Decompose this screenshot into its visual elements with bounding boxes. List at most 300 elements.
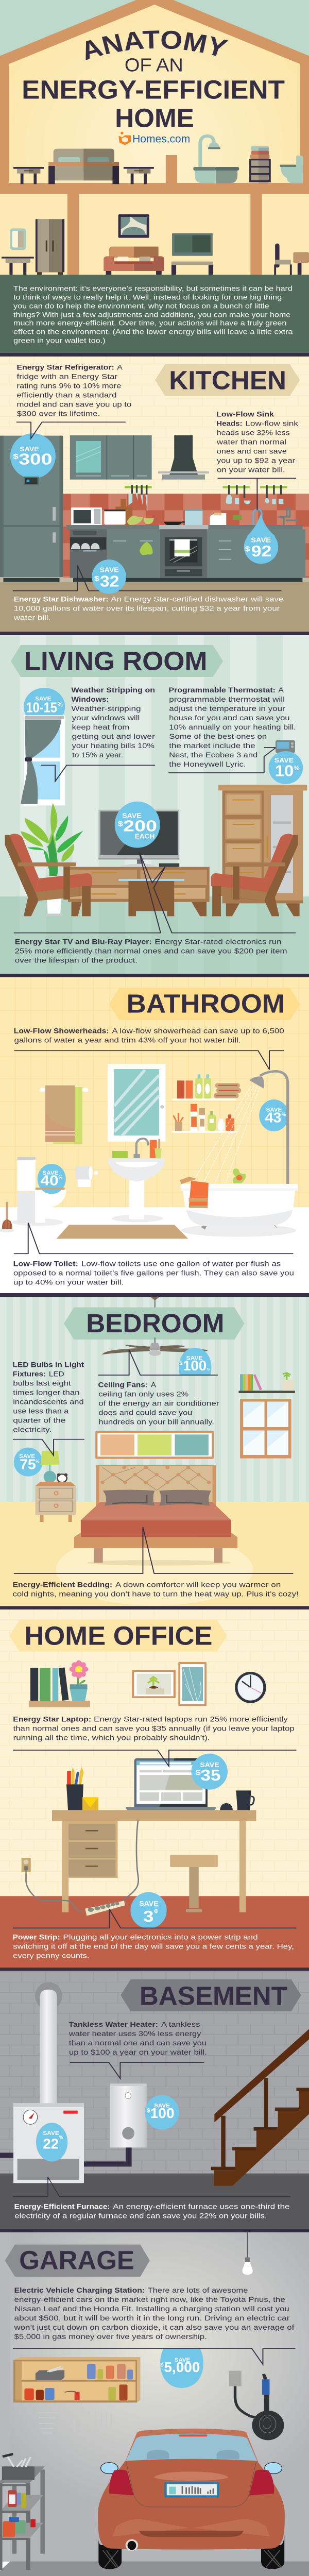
icon: nightstand right (124, 167, 154, 184)
callout: save 300: 300 (19, 450, 52, 468)
text: refrigerator: model and can save you up to (17, 401, 131, 409)
callout line: toilet (14, 1223, 293, 1253)
icon: bookshelf (238, 1372, 295, 1393)
text: charging station: won’t just cut down on carbon dioxide, it can also save you an average of (13, 2324, 295, 2332)
callout: save 92: SAVE (251, 537, 271, 544)
title (22, 30, 285, 133)
icon: fridge display (24, 477, 39, 485)
text: weather stripping (72, 686, 155, 759)
callout: save 32: $ (94, 574, 100, 583)
text: ceiling fans: ceiling fan only uses 2% (98, 1391, 188, 1398)
garage floor (0, 2562, 309, 2576)
callout: save 200 each: SAVE (122, 812, 142, 819)
text: laptop: running all the time, which you probably shouldn’t). (13, 1734, 210, 1742)
callout: save 100: SAVE (154, 2102, 170, 2109)
callout: save 100: 100 (150, 2106, 175, 2121)
callout line: power strip (13, 1909, 297, 1928)
text: tv and blu-ray (15, 938, 287, 964)
icon: stool (170, 1855, 218, 1912)
icon: mirror cabinet (108, 1064, 165, 1142)
callout: save 300: SAVE (20, 446, 39, 453)
text: tankless water heater: A tankless (161, 2021, 200, 2029)
living room floor (0, 896, 309, 974)
callout: save 22 percent (36, 2123, 67, 2162)
text: tv and blu-ray: Energy Star TV and Blu-Ray Player: (15, 938, 152, 946)
text: sink heads: heads use 32% less (217, 429, 289, 437)
callout: save 5000: $ (160, 2362, 164, 2368)
text: charging station: Electric Vehicle Charging Station: (14, 2286, 145, 2295)
callout line: sink (217, 478, 296, 510)
icon: thermostat (276, 740, 295, 753)
icon: bed (74, 1465, 237, 1566)
callout: save 100: $ (147, 2108, 150, 2114)
panel: bedroom (0, 1297, 309, 1609)
icon: refrigerator (0, 436, 63, 578)
callout: save 200 each (115, 802, 160, 848)
text: dishwasher (13, 596, 283, 622)
icon: toilet (12, 1157, 66, 1226)
text: sink heads: ones and can save (217, 448, 287, 455)
sky background (0, 0, 309, 275)
text: power strip (12, 1934, 294, 1960)
callout: save 5000: 5,000 (164, 2360, 200, 2375)
callout: save 32 (92, 560, 126, 594)
text: thermostat: adjust the temperature in your (169, 705, 285, 713)
icon: coffee table (118, 879, 184, 916)
icon: stairs (211, 2029, 309, 2186)
icon: wrenches (38, 2408, 111, 2433)
intro text: things? With just a few adjustments and additions, you can make your home (13, 311, 290, 319)
text: dishwasher: 10,000 gallons of water over its lifespan, cutting $32 a year from your (14, 605, 280, 613)
bedroom floor (0, 1502, 309, 1606)
text: showerheads: Low-Flow Showerheads: (14, 1027, 109, 1035)
callout: save 100 (145, 2095, 179, 2130)
callout: save 10-15 percent: SAVE (35, 695, 52, 702)
text: bedding: A down comforter will keep you warmer on (115, 1581, 281, 1589)
icon: plant (21, 803, 83, 916)
text: tankless water heater: Tankless Water Heater: (69, 2021, 158, 2029)
text: charging station: There are lots of awesome (148, 2286, 248, 2295)
icon: nightstand left (13, 167, 44, 184)
callout: save 10-15 percent (24, 688, 65, 725)
title: OF AN (125, 55, 183, 76)
callout line: led bulbs (13, 1439, 84, 1455)
icon: shower water (194, 1086, 260, 1183)
text: thermostat: house for you and can save you (169, 714, 289, 722)
panel: introduction (0, 275, 309, 357)
icon: toilet paper (76, 1166, 98, 1187)
text: sink heads: on your water bill. (217, 466, 285, 474)
panel: house header (0, 0, 309, 275)
text: weather stripping: Weather-stripping (72, 705, 141, 713)
icon: ceiling fan (101, 1337, 208, 1356)
icon: shelf with books and flower (29, 1660, 90, 1707)
text: bedding (12, 1581, 299, 1598)
intro text: green in your wallet too.) (13, 337, 106, 345)
icon: car (98, 2429, 285, 2569)
icon: towel drawers (249, 146, 271, 183)
icon: tv (98, 810, 179, 867)
text: laptop (13, 1716, 295, 1742)
text: ceiling fans: does and could save you (98, 1409, 192, 1417)
text: furnace: electricity of a regular furnace and can save you 22% on your bills. (14, 2212, 267, 2220)
icon: charging station (229, 2371, 284, 2440)
text: dishwasher: water bill. (13, 614, 50, 622)
text: ceiling fans: of the energy an air conditioner (98, 1400, 219, 1408)
callout: save 92: 92 (251, 542, 271, 560)
callout: save 32: 32 (100, 572, 119, 590)
text: weather stripping: your heating bills 10% (72, 742, 154, 750)
intro text: The environment: it’s everyone’s responsibility, but sometimes it can be hard (13, 285, 293, 293)
callout: save 40 percent: % (59, 1175, 63, 1180)
text: thermostat: A (278, 686, 284, 694)
bathroom floor (0, 1207, 309, 1293)
text: thermostat: 10% annually on your heating bill. (169, 723, 296, 732)
icon: picture (118, 214, 149, 238)
kitchen brick wall (0, 357, 309, 583)
office brick wall (0, 1609, 309, 1896)
text: power strip: every penny counts. (13, 1952, 89, 1960)
callout: save 10 percent: SAVE (274, 757, 294, 764)
icon: tankless water heater (110, 2083, 147, 2147)
bathroom tile wall (0, 977, 309, 1208)
text: ceiling fans: Ceiling Fans: (98, 1381, 148, 1389)
text: weather stripping: your windows will (72, 714, 140, 722)
callout: save 10 percent: % (294, 765, 300, 772)
icon: metal shelf (0, 2453, 45, 2570)
logo: Homes.com: Homes.com (132, 132, 190, 145)
icon: range hood (158, 435, 209, 480)
callout: save 43 percent: SAVE (266, 1106, 282, 1113)
icon: bed (48, 149, 119, 184)
house outer wall (0, 0, 309, 275)
callout: save 43 percent: 43 (265, 1110, 281, 1126)
logo: Homes.com (118, 132, 190, 145)
intro background (0, 275, 309, 353)
text: refrigerator: Energy Star Refrigerator: (17, 364, 114, 371)
callout: save 100s: $ (179, 1361, 182, 1366)
icon: hanging utensils (125, 485, 287, 512)
text: tankless water heater (68, 2021, 207, 2057)
garage wall (0, 2232, 309, 2562)
callout: save 100s: s (207, 1367, 210, 1372)
callout: save 3 cents: SAVE (139, 1900, 159, 1907)
text: furnace (14, 2203, 289, 2220)
text: refrigerator: efficiently than a standard (17, 392, 117, 399)
icon: light bulb (243, 2232, 253, 2275)
text: sink heads: Low-Flow Sink (216, 411, 274, 418)
text: led bulbs: LED (49, 1370, 64, 1378)
icon: tall cabinet (218, 785, 307, 916)
icon: mirror (10, 228, 26, 250)
icon: sofa (104, 247, 164, 275)
callout: save 92 (244, 530, 278, 564)
text: laptop: Energy Star Laptop: (13, 1716, 91, 1723)
callout line: laptop (13, 1750, 297, 1766)
icon: desk (52, 1810, 256, 1912)
icon: counter and lower cabinets (66, 525, 305, 578)
icon: armchair right (211, 834, 298, 916)
text: charging station: $5,000 in gas money over five years of ownership. (14, 2333, 207, 2341)
panel: kitchen (0, 357, 309, 635)
intro text: you can do to help the environment, why not focus on a bunch of little (13, 302, 269, 310)
text: weather stripping: Windows: (72, 696, 109, 704)
text: refrigerator: rating runs 9% to 10% more (17, 382, 121, 390)
text: showerheads: A low-flow showerhead can save up to 6,500 (112, 1027, 284, 1035)
text: led bulbs: quarter of the (13, 1417, 65, 1425)
icon: counter appliances (71, 499, 299, 525)
title: ENERGY-EFFICIENT (22, 75, 285, 105)
icon: shower head (249, 1071, 288, 1185)
icon: wardrobe (36, 219, 64, 275)
panel: basement (0, 1971, 309, 2232)
text: tv and blu-ray: Energy Star-rated electronics run (154, 938, 281, 946)
callout: save 300 (10, 433, 56, 479)
title: ANATOMY (85, 30, 229, 60)
text: furnace: Energy-Efficient Furnace: (14, 2203, 110, 2211)
callout: save 3 cents: ¢ (154, 1907, 158, 1916)
kitchen floor (0, 578, 309, 632)
attic room interior (9, 5, 300, 183)
panel: home office (0, 1609, 309, 1971)
callout: save 100s: SAVE (186, 1354, 202, 1361)
icon: pipes (0, 2145, 129, 2164)
text: thermostat: the Honeywell Lyric. (169, 760, 246, 769)
kitchen tile backsplash (63, 494, 309, 578)
callout: save 5000: SAVE (175, 2357, 190, 2363)
callout: save 10-15 percent: 10-15 (26, 700, 57, 716)
heading: kitchen: KITCHEN (169, 365, 286, 395)
callout: save 200 each: 200 (123, 817, 157, 835)
callout: save 43 percent: % (282, 1112, 286, 1117)
text: charging station (13, 2286, 295, 2341)
text: led bulbs: use less than a (13, 1408, 69, 1415)
text: toilet: opposed to a normal toilet’s five gallons per flush. They can also save you (13, 1269, 294, 1277)
icon: window with curtain (21, 715, 65, 805)
heading: bedroom: BEDROOM (86, 1309, 224, 1338)
text: showerheads (14, 1027, 284, 1044)
icon: tv unit (68, 867, 210, 916)
text: weather stripping: Weather Stripping on (72, 686, 155, 694)
intro text: to think of ways to really help it. Well, instead of looking for one big thing (13, 294, 282, 301)
heading: living room: LIVING ROOM (24, 646, 208, 676)
callout: save 10-15 percent: % (58, 701, 63, 708)
text: dishwasher: An Energy Star-certified dishwasher will save (111, 596, 283, 603)
intro text: effect on the environment. (And the lower energy bills will leave a little extra (13, 328, 293, 336)
text: sink heads: you up to $92 a year (217, 457, 295, 465)
title: HOME (115, 103, 194, 133)
bedroom wall (0, 1297, 309, 1502)
callout: save 22 percent: 22 (43, 2137, 59, 2152)
icon: pencil cup and envelope (66, 1767, 98, 1810)
heading: bathroom: BATHROOM (127, 989, 285, 1019)
callout: save 100s (179, 1348, 211, 1375)
text: charging station: Nissan Leaf and the Honda Fit. Installing a charging station will cost you (14, 2305, 289, 2313)
text: led bulbs: LED Bulbs in Light (12, 1361, 84, 1369)
callout line: water heater (70, 2062, 204, 2078)
text: power strip: switching it off at the end of the day will save you a few cents a year. Hey, (13, 1943, 294, 1951)
icon: shelves with toiletries (172, 1074, 241, 1133)
icon: window (240, 1399, 291, 1459)
intro text (13, 285, 293, 345)
callout line: tv and blu-ray (14, 852, 296, 933)
callout: save 75 percent (14, 1448, 43, 1477)
callout: save 32: SAVE (99, 567, 119, 573)
text: power strip: Plugging all your electronics into a power strip and (63, 1934, 258, 1941)
text: refrigerator: fridge with an Energy Star (17, 373, 117, 381)
icon: toilet (280, 156, 303, 183)
callout line: refrigerator (16, 422, 126, 438)
callout line: weather stripping (41, 765, 155, 782)
callout: save 43 percent (259, 1099, 289, 1131)
callout line: dishwasher (13, 565, 281, 591)
icon: wooden shelf (13, 2357, 140, 2402)
callout line: thermostat (168, 748, 276, 773)
panel: bathroom (0, 977, 309, 1297)
callout: save 35 (192, 1754, 228, 1790)
text: thermostat: Some of the best ones on (169, 733, 267, 741)
icon: side table (2, 257, 34, 275)
text: thermostat: Programmable Thermostat: (169, 686, 276, 694)
callout: save 35: 35 (201, 1766, 221, 1784)
callout: save 75 percent: 75 (20, 1457, 36, 1472)
text: led bulbs (12, 1361, 84, 1434)
text: tankless water heater: up to $100 a year on your water bill. (69, 2048, 207, 2057)
callout: save 10 percent (269, 751, 303, 784)
icon: dishwasher and oven (70, 537, 231, 576)
icon: hose (254, 2413, 282, 2438)
text: refrigerator: A (117, 364, 123, 371)
text: thermostat: Nest, the Ecobee 3 and (169, 751, 258, 759)
icon: power strip (85, 1901, 125, 1916)
callout: save 5000 (160, 2348, 203, 2388)
callout line: bedding (14, 1527, 293, 1573)
text: tv and blu-ray: over the lifespan of the product. (15, 957, 138, 964)
callout line: furnace (13, 2177, 290, 2197)
callout: save 22 percent: % (59, 2135, 63, 2140)
text: bedding: cold nights, meaning you don’t have to turn the heat way up. Plus it’s cozy! (12, 1590, 299, 1598)
text: toilet (13, 1260, 294, 1286)
callout line: ceiling fan (98, 1350, 218, 1375)
callout: save 3 cents: 3 (143, 1907, 153, 1925)
text: charging station: energy-efficient cars on the market right now, like the Toyota Prius, the (14, 2296, 285, 2304)
text: refrigerator (17, 364, 131, 418)
intro text: much more energy-efficient. Over time, your actions will have a truly green (13, 319, 286, 327)
text: refrigerator: $300 over its lifetime. (17, 410, 100, 418)
basement floor (0, 2174, 309, 2229)
text: laptop: Energy Star-rated laptops run 25% more efficiently (94, 1716, 288, 1723)
text: tankless water heater: water heater uses 30% less energy (68, 2030, 201, 2038)
text: sink heads: Heads: (216, 420, 243, 428)
icon: armchair left (5, 834, 92, 916)
icon: mouse and mug (220, 1790, 254, 1810)
text: toilet: Low-flow toilets use one gallon of water per flush as (81, 1260, 281, 1268)
basement brick wall (0, 1971, 309, 2174)
icon: tv (171, 233, 213, 275)
icon: wall clock (235, 1672, 266, 1703)
icon: dining chair and table (275, 244, 309, 275)
icon: ceiling lamp mount (150, 1297, 160, 1310)
heading: basement: BASEMENT (140, 1981, 287, 2011)
text: furnace: An energy-efficient furnace uses one-third the (113, 2203, 289, 2211)
callout: save 300: $ (13, 453, 19, 461)
text: ceiling fans (98, 1381, 219, 1426)
icon: furnace (13, 1982, 84, 2183)
living room wall (0, 635, 309, 896)
text: charging station: about $500, but it will be worth it in the long run. Driving an electric car (14, 2314, 289, 2323)
text: thermostat: the market include the (169, 742, 255, 750)
text: laptop: than normal ones and can save you $35 annually (if you leave your laptop (13, 1725, 295, 1733)
icon: outlet and cables (22, 1820, 139, 1911)
text: sink heads: water than normal (216, 438, 286, 446)
callout: save 40 percent: SAVE (42, 1170, 59, 1176)
text: ceiling fans: A (151, 1381, 157, 1389)
icon: upper cabinets (70, 435, 152, 480)
text: thermostat: programmable thermostat will (169, 696, 285, 704)
callout: save 75 percent: SAVE (19, 1453, 35, 1460)
icon: laptop (126, 1758, 216, 1810)
icon: lamp and clock on nightstand (35, 1451, 76, 1522)
text: toilet: up to 40% on your water bill. (13, 1279, 124, 1286)
panel: garage (0, 2232, 309, 2576)
callout line: charging station (13, 2348, 296, 2364)
icon: bathtub (180, 1168, 298, 1237)
callout: save 3 cents (130, 1892, 167, 1928)
callout: save 10 percent: 10 (275, 762, 294, 779)
text: led bulbs: Fixtures: (12, 1370, 46, 1378)
callout: save 40 percent: 40 (40, 1173, 59, 1189)
text: led bulbs: electricity. (13, 1426, 52, 1434)
callout line: showerhead (14, 1050, 284, 1070)
garage side wall (0, 2232, 10, 2562)
text: weather stripping: keep heat from (72, 723, 129, 732)
icon: toilet brush (0, 1202, 14, 1232)
text: ceiling fans: hundreds on your bill annually. (98, 1418, 214, 1426)
callout: save 35: SAVE (200, 1761, 219, 1769)
icon: bath mat (56, 1225, 188, 1239)
text: thermostat (169, 686, 296, 769)
icon: wall art (95, 1431, 214, 1459)
text: power strip: Power Strip: (12, 1934, 60, 1941)
callout: save 22 percent: SAVE (43, 2130, 59, 2137)
callout: save 92: $ (245, 545, 250, 553)
callout: save 75 percent: % (36, 1459, 40, 1464)
text: weather stripping: getting out and lower (72, 733, 155, 741)
icon: towels (40, 1086, 88, 1144)
text: sink heads: Low-flow sink (245, 420, 298, 428)
callout: save 200 each: $ (118, 820, 123, 828)
callout: save 100s: 100 (183, 1358, 207, 1374)
text: bedding: Energy-Efficient Bedding: (12, 1581, 112, 1589)
icon: bathtub (193, 136, 239, 183)
lower rooms interior (0, 194, 309, 275)
icon: sink (108, 1139, 165, 1222)
text: led bulbs: times longer than (13, 1389, 80, 1397)
text: weather stripping: to 15% a year. (72, 751, 123, 759)
callout: save 35: $ (196, 1769, 201, 1777)
icon: water drop (247, 514, 275, 545)
text: tv and blu-ray: 25% more efficiently than normal ones and can save you $200 per item (15, 947, 287, 955)
text: sink heads (216, 411, 298, 474)
heading: garage: GARAGE (19, 2245, 134, 2275)
icon: framed pictures (132, 1662, 207, 1706)
office floor (0, 1896, 309, 1968)
text: led bulbs: incandescents and (13, 1398, 84, 1406)
text: toilet: Low-Flow Toilet: (13, 1260, 78, 1268)
text: led bulbs: bulbs last eight (13, 1380, 72, 1387)
panel: living room (0, 635, 309, 977)
text: showerheads: gallons of water a year and trim 43% off your hot water bill. (14, 1037, 241, 1044)
